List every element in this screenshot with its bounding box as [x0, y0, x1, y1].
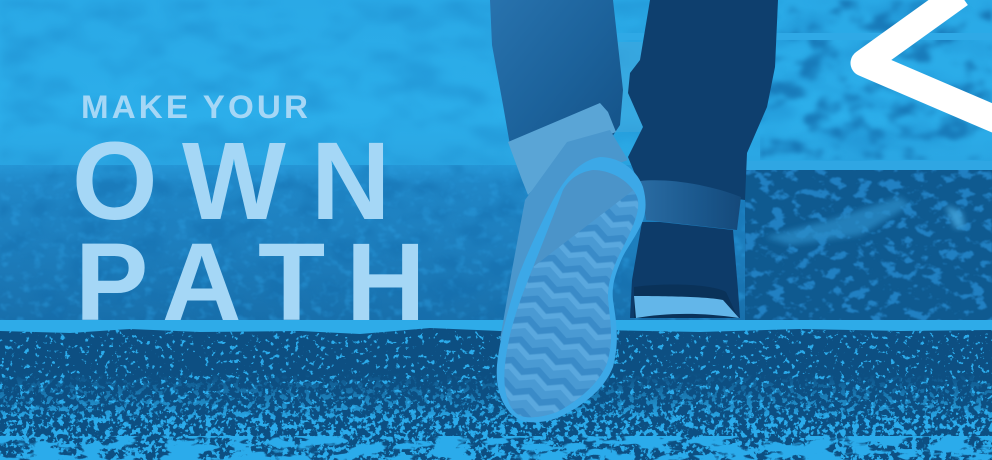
sole inner [504, 170, 638, 417]
heading line: make your: MAKE YOUR [81, 89, 311, 125]
heading line: own: OWN [72, 120, 390, 243]
right leg [628, 0, 778, 318]
shoe upper [500, 130, 628, 350]
jeans [490, 0, 623, 170]
title [72, 89, 425, 344]
heading line: path: PATH [75, 221, 425, 344]
background: front step [0, 320, 992, 460]
background: middle step [0, 161, 992, 322]
boot welt [634, 285, 738, 318]
background: upper wall [0, 0, 992, 165]
tread pattern [504, 190, 638, 418]
sole rim [497, 157, 646, 422]
shoe with tread sole [496, 130, 646, 422]
rolled cuff [508, 103, 616, 195]
boot [630, 222, 740, 318]
chevron arrow [864, 0, 992, 123]
left leg [490, 0, 623, 195]
cuff [640, 180, 741, 230]
boot sole [634, 296, 739, 318]
trouser: dark jeans [628, 0, 778, 200]
